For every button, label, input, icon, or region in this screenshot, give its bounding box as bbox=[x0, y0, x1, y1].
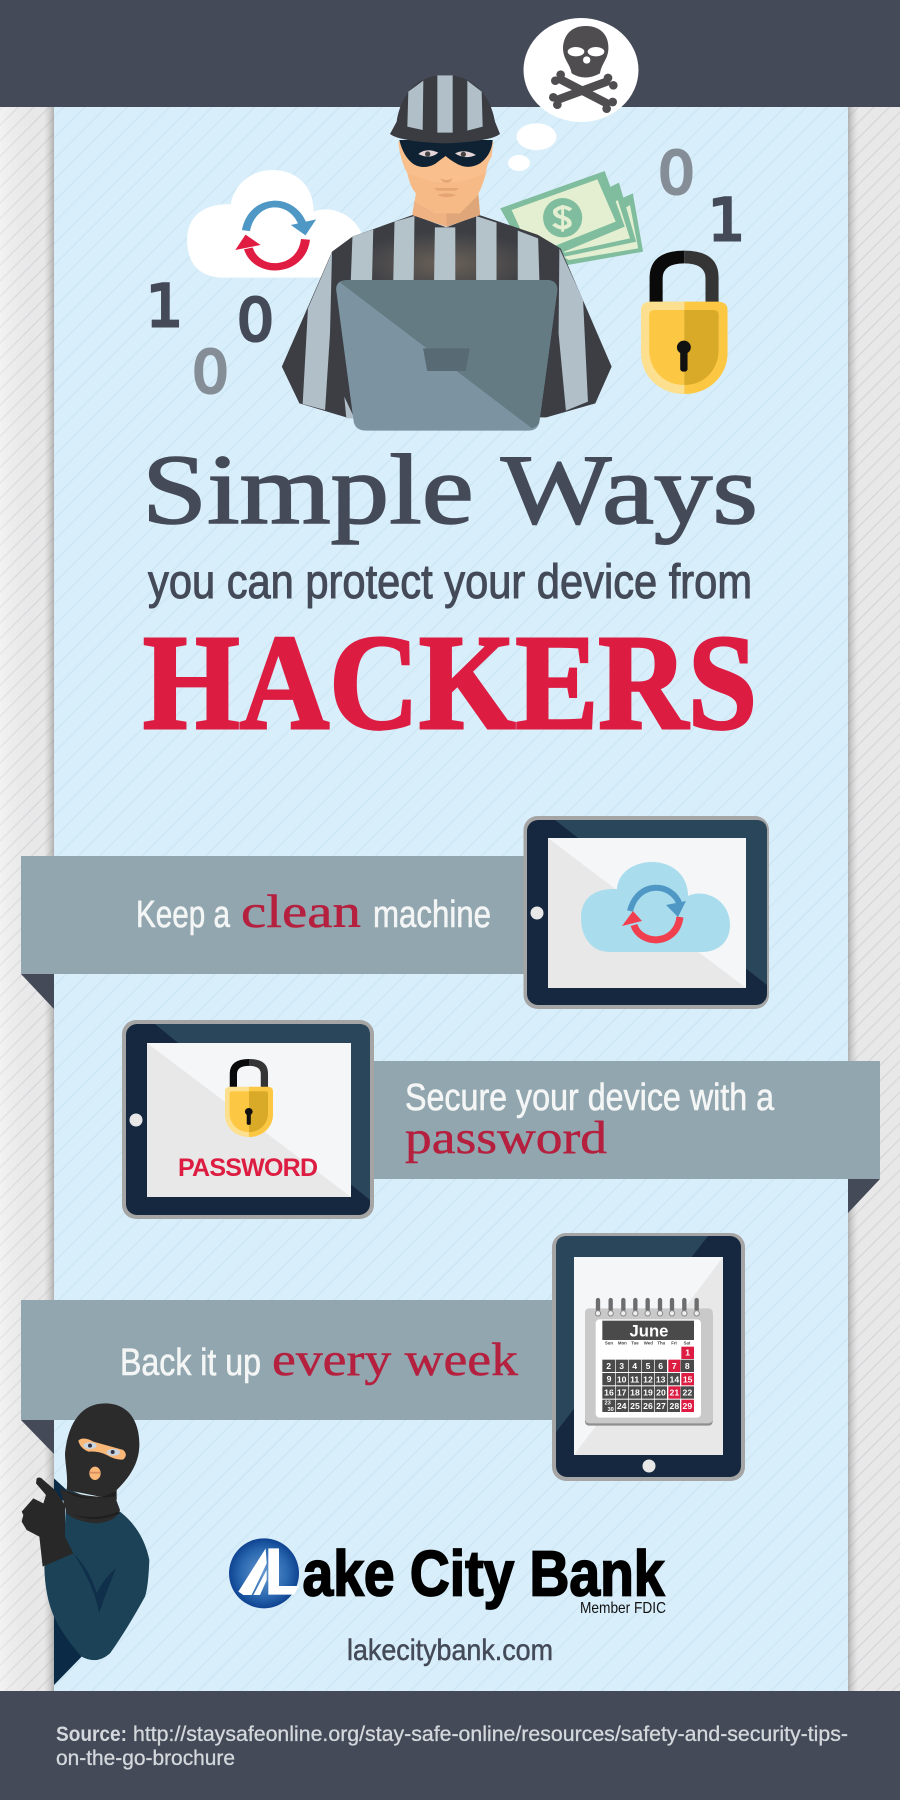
icon: calendar: 6 bbox=[658, 1361, 663, 1371]
icon: calendar: 18 bbox=[630, 1388, 640, 1398]
icon: calendar: Sat bbox=[684, 1340, 691, 1345]
icon: calendar: 21 bbox=[670, 1388, 679, 1398]
footer bar bbox=[0, 1691, 900, 1800]
binary digits: 0 bbox=[237, 286, 274, 354]
source text bbox=[56, 1723, 848, 1770]
mouth bbox=[89, 1467, 101, 1480]
icon: calendar: 19 bbox=[643, 1388, 653, 1398]
icon: calendar: 7 bbox=[672, 1361, 677, 1371]
icon: calendar: 26 bbox=[643, 1401, 653, 1411]
icon: calendar: June bbox=[630, 1322, 668, 1341]
masked man bbox=[22, 1403, 149, 1685]
ribbon 1 bbox=[21, 856, 526, 1009]
title: HACKERS: HACKERS bbox=[143, 608, 757, 758]
binary digits bbox=[146, 139, 745, 406]
icon: calendar: 20 bbox=[656, 1388, 666, 1398]
money bbox=[500, 171, 643, 265]
sleeve fold bbox=[73, 1553, 116, 1613]
icon: calendar: Mon bbox=[618, 1340, 627, 1345]
ribbon 3: every week bbox=[272, 1334, 519, 1386]
tablet 1: cloud bbox=[524, 816, 769, 1009]
binary digits: 1 bbox=[146, 272, 183, 340]
tablet 3: calendar bbox=[552, 1233, 745, 1481]
ribbon 3: Back it up bbox=[120, 1342, 261, 1384]
glove bbox=[22, 1477, 73, 1567]
scarf bbox=[60, 1488, 120, 1523]
source text: http://staysafeonline.org/stay-safe-online/resources/safety-and-security-tips- bbox=[133, 1723, 848, 1746]
body bbox=[44, 1488, 149, 1660]
ribbon 2: password bbox=[405, 1112, 607, 1164]
icon: calendar: 8 bbox=[685, 1361, 690, 1371]
source text: Source: bbox=[56, 1723, 127, 1746]
ribbon 1: clean bbox=[241, 886, 361, 938]
icon: calendar: Sun bbox=[605, 1340, 613, 1345]
ribbon 1: Keep a bbox=[136, 894, 231, 936]
ribbon 1: machine bbox=[373, 894, 491, 936]
website: lakecitybank.com bbox=[347, 1634, 553, 1667]
thought bubble: skull bbox=[508, 18, 638, 171]
icon: calendar: 9 bbox=[607, 1374, 612, 1384]
icon: calendar: 24 bbox=[617, 1401, 627, 1411]
icon: cloud sync bbox=[581, 862, 730, 952]
head bbox=[390, 75, 500, 227]
ribbon 3 bbox=[21, 1300, 553, 1454]
logo: Lake City Bank: ake City Bank bbox=[302, 1538, 665, 1610]
icon: padlock bbox=[225, 1059, 273, 1137]
password label: PASSWORD bbox=[178, 1154, 318, 1182]
ribbon 2: Secure your device with a bbox=[405, 1077, 775, 1119]
icon: calendar bbox=[585, 1300, 713, 1426]
icon: calendar: Thu bbox=[657, 1340, 666, 1345]
icon: calendar: 28 bbox=[670, 1401, 679, 1411]
icon: calendar: 30 bbox=[608, 1407, 614, 1413]
icon: calendar: 15 bbox=[683, 1374, 693, 1384]
icon: calendar: 25 bbox=[630, 1401, 640, 1411]
ribbon 2 bbox=[374, 1061, 880, 1213]
icon: calendar: 23 bbox=[605, 1400, 611, 1406]
top bar bbox=[0, 0, 900, 107]
icon: calendar: 29 bbox=[683, 1401, 692, 1411]
icon: calendar: 27 bbox=[656, 1401, 666, 1411]
laptop bbox=[336, 280, 557, 431]
side background left bbox=[0, 107, 54, 1691]
logo: Lake City Bank: Member FDIC bbox=[580, 1600, 666, 1617]
side background right bbox=[848, 107, 900, 1691]
binary digits: 0 bbox=[192, 338, 229, 406]
icon: calendar: 22 bbox=[683, 1388, 692, 1398]
panel: light blue sheet bbox=[54, 107, 848, 1691]
eye band bbox=[78, 1439, 126, 1460]
padlock bbox=[641, 251, 728, 394]
cloud with sync arrows bbox=[187, 170, 362, 278]
icon: calendar: 10 bbox=[617, 1374, 627, 1384]
title: Simple Ways: Simple Ways bbox=[142, 434, 758, 545]
subtitle: you can protect your device from bbox=[148, 556, 752, 609]
binary digits: 0 bbox=[658, 139, 695, 207]
icon: calendar: Fri bbox=[671, 1340, 677, 1345]
icon: calendar: Tue bbox=[631, 1340, 639, 1345]
icon: calendar: 13 bbox=[656, 1374, 666, 1384]
tablet 2: password bbox=[122, 1020, 374, 1219]
shirt bbox=[282, 215, 612, 418]
icon: calendar: 5 bbox=[646, 1361, 651, 1371]
icon: calendar: 2 bbox=[606, 1361, 611, 1371]
icon: calendar: 3 bbox=[619, 1361, 624, 1371]
icon: calendar: Wed bbox=[644, 1340, 653, 1345]
icon: calendar: 1 bbox=[685, 1348, 690, 1358]
icon: calendar: 16 bbox=[604, 1388, 614, 1398]
dark cloak bbox=[54, 1478, 82, 1685]
icon: calendar: 17 bbox=[617, 1388, 627, 1398]
binary digits: 1 bbox=[708, 186, 745, 254]
icon: calendar: 4 bbox=[632, 1361, 637, 1371]
balaclava bbox=[65, 1403, 139, 1500]
icon: calendar: 11 bbox=[630, 1374, 639, 1384]
logo: Lake City Bank bbox=[229, 1538, 666, 1617]
source text: on-the-go-brochure bbox=[56, 1747, 235, 1770]
hacker figure bbox=[282, 75, 612, 431]
icon: calendar: 14 bbox=[670, 1374, 679, 1384]
icon: calendar: 12 bbox=[643, 1374, 653, 1384]
